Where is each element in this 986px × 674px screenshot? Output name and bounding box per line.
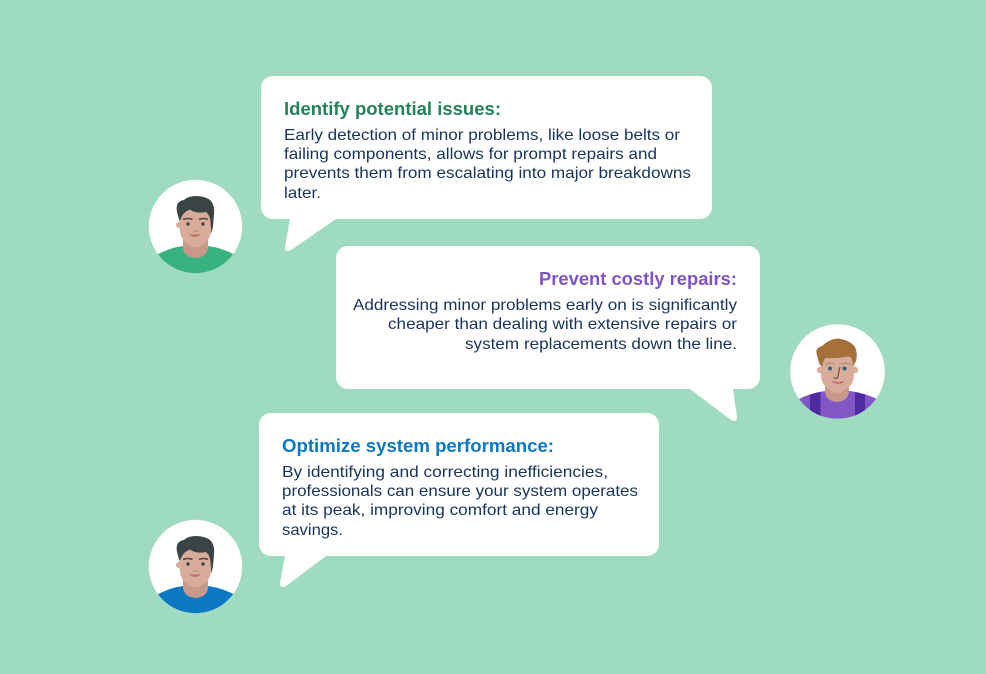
eyebrows: [826, 362, 850, 364]
bubble shape: [261, 76, 712, 251]
ear: [176, 562, 180, 568]
avatar circle: [149, 180, 242, 273]
bubble shape: [336, 246, 760, 421]
body text: savings.: [282, 521, 343, 539]
shirt: [158, 586, 234, 614]
hair: [177, 536, 214, 574]
shirt: [799, 391, 876, 419]
body text: [284, 126, 691, 202]
overall straps: [810, 392, 865, 416]
nose: [834, 367, 840, 378]
mouth: [190, 234, 200, 236]
body text: prevents them from escalating into major breakdowns: [284, 164, 691, 182]
face: [180, 548, 212, 588]
body text: By identifying and correcting inefficiencies,: [282, 463, 608, 481]
body text: professionals can ensure your system operates: [282, 482, 638, 500]
avatar: man in green shirt: [149, 180, 242, 276]
face: [180, 208, 212, 248]
neck: [183, 240, 208, 258]
mouth: [190, 574, 200, 576]
body text: [282, 463, 638, 539]
body text: Addressing minor problems early on is significantly: [353, 296, 738, 314]
eyebrows: [183, 558, 208, 560]
speech bubble: prevent costly repairs: [336, 246, 760, 421]
avatar circle: [149, 520, 242, 613]
nose: [192, 230, 198, 232]
nose: [192, 570, 198, 572]
bubble shape: [259, 413, 659, 587]
neck: [183, 580, 208, 598]
eyebrows: [183, 218, 208, 220]
body text: system replacements down the line.: [465, 335, 737, 353]
shirt: [158, 246, 234, 274]
heading: prevent costly repairs: Prevent costly repairs:: [539, 268, 737, 289]
face: [821, 356, 854, 393]
speech bubble: identify potential issues: [261, 76, 712, 251]
body text: [353, 296, 738, 353]
eyes: [186, 562, 190, 566]
speech bubble: optimize system performance: [259, 413, 659, 587]
body text: failing components, allows for prompt repairs and: [284, 145, 657, 163]
heading: optimize system performance: Optimize system performance:: [282, 435, 554, 456]
hair: [816, 338, 857, 367]
ear: [176, 222, 180, 228]
mouth: [832, 382, 844, 383]
body text: cheaper than dealing with extensive repairs or: [388, 315, 738, 333]
body text: Early detection of minor problems, like loose belts or: [284, 126, 681, 144]
avatar circle: [790, 324, 885, 419]
hair: [177, 196, 214, 234]
body text: later.: [284, 184, 321, 202]
body text: at its peak, improving comfort and energy: [282, 501, 599, 519]
neck: [825, 386, 849, 402]
eyes: [186, 222, 190, 226]
avatar: man with brown hair and purple overalls: [790, 324, 885, 422]
avatar: man in blue shirt: [149, 520, 242, 616]
eyes: [828, 366, 832, 370]
heading: identify potential issues: Identify potential issues:: [284, 98, 501, 119]
ears: [816, 366, 821, 374]
